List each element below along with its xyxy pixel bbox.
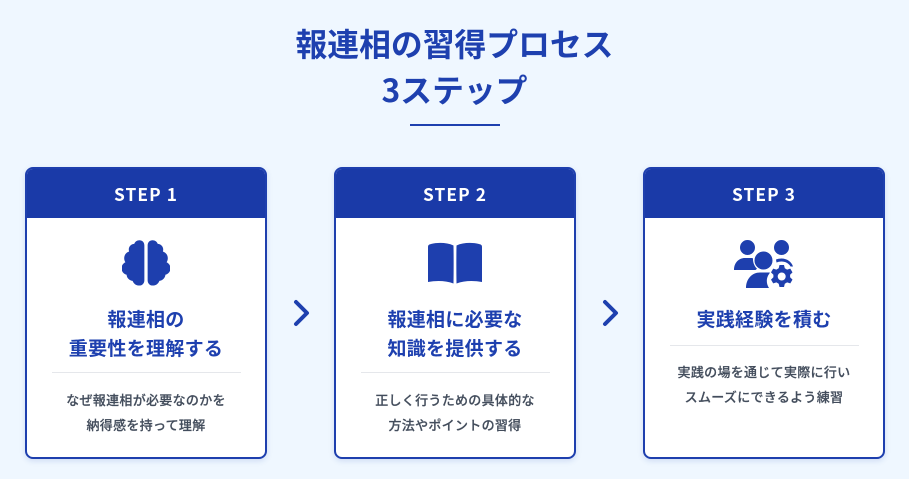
step 1 description: 納得感を持って理解 [86, 415, 206, 434]
step 3 header: STEP 3 [732, 181, 796, 206]
arrow 1 [294, 300, 310, 326]
step 2 description: 正しく行うための具体的な [375, 390, 535, 409]
step 1 heading: 重要性を理解する [69, 334, 223, 361]
icon: brain [122, 240, 170, 286]
step 3 description: 実践の場を通じて実際に行い [678, 362, 850, 381]
arrow 2 [602, 300, 618, 326]
step 2 description [375, 390, 535, 434]
step 3 description [678, 362, 850, 406]
step 1 description [66, 390, 226, 434]
step 1 header [27, 169, 265, 218]
divider [670, 345, 859, 346]
icon: people with gear [734, 240, 793, 288]
step 3 header [645, 169, 883, 218]
title: 報連相の習得プロセス [296, 20, 613, 66]
panel: step 3 [643, 167, 885, 459]
panel: step 1 [25, 167, 267, 459]
divider [52, 372, 241, 373]
step 3 heading: 実践経験を積む [696, 305, 832, 332]
title underline [410, 124, 500, 126]
step 2 heading [387, 305, 523, 361]
step 2 heading: 報連相に必要な [387, 305, 523, 332]
divider [361, 372, 550, 373]
icon: open book [428, 242, 482, 284]
step 2 heading: 知識を提供する [387, 334, 523, 361]
step 2 description: 方法やポイントの習得 [388, 415, 522, 434]
step 1 heading [69, 305, 223, 361]
step 1 header: STEP 1 [114, 181, 178, 206]
step 1 heading: 報連相の [107, 305, 185, 332]
step 3 description: スムーズにできるよう練習 [685, 387, 843, 406]
step 2 header [336, 169, 574, 218]
panel: step 2 [334, 167, 576, 459]
step 1 description: なぜ報連相が必要なのかを [66, 390, 226, 409]
step 2 header: STEP 2 [423, 181, 487, 206]
title [296, 20, 613, 112]
title: 3ステップ [382, 66, 527, 112]
